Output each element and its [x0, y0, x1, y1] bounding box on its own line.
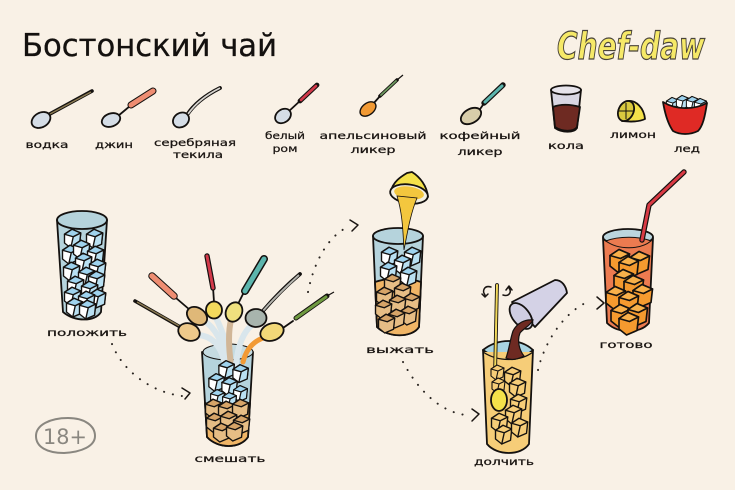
title: Бостонский чай — [22, 28, 277, 64]
ingredient: cola glass — [551, 86, 581, 132]
ingredient: orange liqueur spoon — [357, 75, 403, 119]
label: готово: готово — [600, 340, 652, 351]
spoon: vodka — [135, 301, 202, 344]
arrow: step 1 to step 2 — [112, 344, 190, 399]
label: положить: положить — [47, 328, 127, 339]
label: смешать: смешать — [194, 454, 266, 465]
spoon: gin — [152, 276, 211, 329]
ingredient: silver tequila spoon — [170, 88, 220, 131]
arrow: step 4 to step 5 — [538, 297, 604, 370]
badge: 18+: 18+ — [43, 425, 87, 449]
arrow: step 2 to step 3 — [308, 220, 358, 292]
lemon with juice stream — [389, 172, 429, 250]
step 1: glass with ice — [57, 211, 107, 320]
label: кола: кола — [548, 141, 584, 152]
label: белый ром: ром — [272, 144, 298, 155]
arrow: step 3 to step 4 — [403, 362, 479, 421]
label: серебряная текила: серебряная — [154, 138, 236, 149]
label: серебряная текила — [154, 138, 236, 161]
label: кофейный ликер — [440, 131, 520, 158]
label: белый ром — [265, 131, 305, 155]
step 2: glass with all spoons pouring — [135, 256, 334, 446]
ingredient: coffee liqueur spoon — [458, 85, 503, 128]
label: водка: водка — [26, 140, 68, 151]
label: кофейный ликер: кофейный — [440, 131, 520, 142]
ingredient: lemon — [615, 98, 645, 124]
label: джин: джин — [95, 140, 133, 151]
step 3: glass with lemon squeeze — [373, 172, 429, 335]
ingredient: gin spoon — [100, 91, 153, 129]
label: лимон: лимон — [610, 130, 656, 141]
spoon: white rum — [206, 256, 222, 318]
ingredient: white rum spoon — [272, 85, 317, 126]
step 5: finished drink with straw — [603, 172, 684, 335]
ingredient: vodka spoon — [29, 91, 92, 131]
spoon: silver tequila — [246, 274, 300, 327]
label: белый ром: белый — [265, 131, 305, 142]
badge: 18+ — [36, 418, 95, 453]
label: апельсиновый ликер: ликер — [350, 145, 396, 156]
label: кофейный ликер: ликер — [458, 147, 502, 158]
spoon: coffee liqueur — [223, 259, 264, 324]
label: долчить: долчить — [474, 457, 534, 468]
stir arrows — [482, 286, 512, 297]
label: апельсиновый ликер: апельсиновый — [320, 131, 426, 142]
ingredient: bowl of ice — [663, 95, 707, 134]
label: лед: лед — [674, 144, 700, 155]
step 4: glass with cola pour and bar spoon — [482, 280, 567, 453]
spoon: orange liqueur — [258, 292, 334, 344]
straw — [642, 172, 684, 240]
label: апельсиновый ликер — [320, 131, 426, 156]
bar spoon — [491, 285, 507, 411]
poured streams — [198, 318, 263, 365]
label: серебряная текила: текила — [173, 150, 223, 161]
tilted cup — [505, 280, 567, 333]
cola stream — [506, 320, 533, 359]
label: выжать: выжать — [366, 345, 434, 356]
